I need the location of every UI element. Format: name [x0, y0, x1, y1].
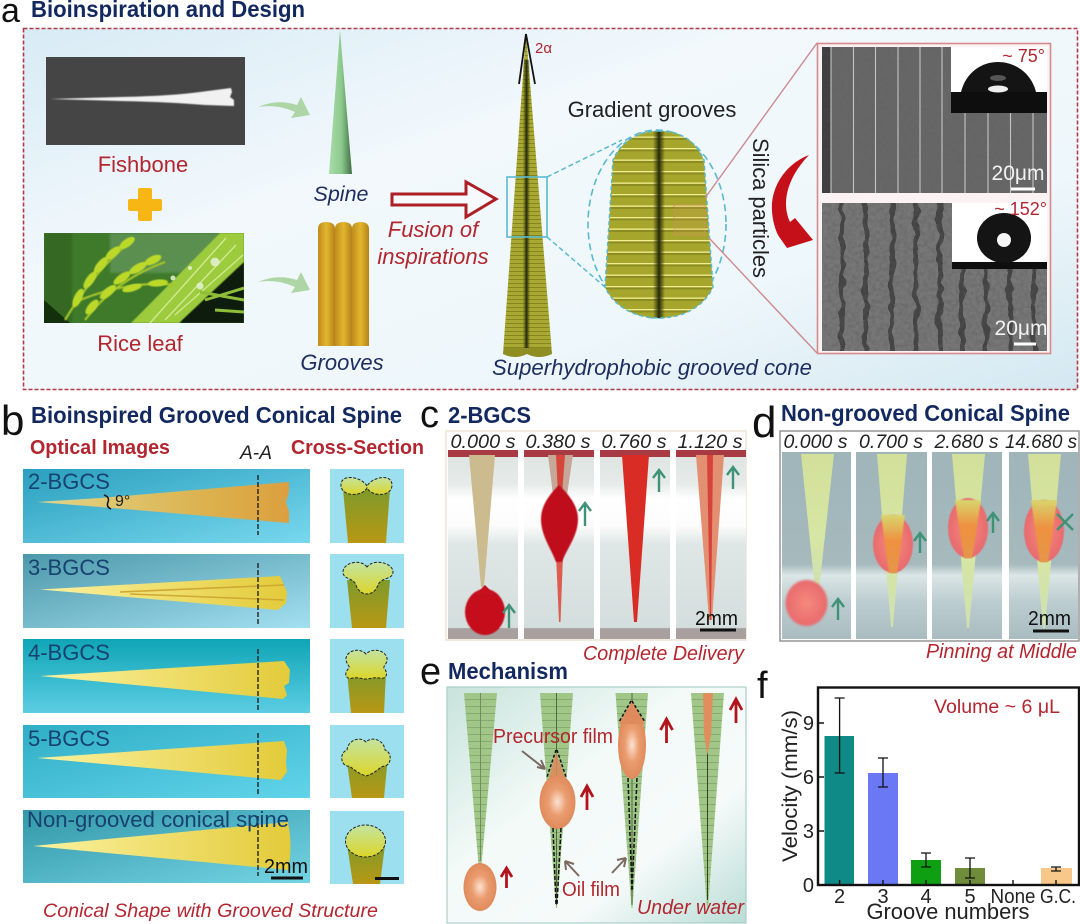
fusion label: inspirations	[377, 244, 489, 269]
bars	[824, 736, 1072, 885]
frame 0.700 s	[856, 431, 927, 639]
panel d: non-grooved time series	[780, 431, 1079, 663]
red curved arrow	[772, 155, 813, 248]
frame 0.380 s	[524, 431, 594, 639]
optical images heading: Optical Images	[30, 437, 170, 459]
oil film label: Oil film	[562, 879, 620, 901]
panel d title: Non-grooved Conical Spine	[781, 400, 1070, 426]
icon: grooves	[318, 222, 369, 346]
frame 14.680 s	[1005, 431, 1078, 639]
y tick labels: 6	[803, 767, 814, 789]
fusion label	[377, 217, 489, 269]
grooves label: Grooves	[300, 350, 384, 375]
y tick labels: 9	[803, 713, 814, 735]
row: 3-BGCS	[23, 554, 404, 628]
frame 2.680 s: 2.680 s	[933, 431, 999, 453]
frame 2.680 s	[932, 431, 1002, 639]
gradient grooves label: Gradient grooves	[568, 97, 736, 122]
y axis label: Velocity (mm/s)	[779, 710, 802, 862]
cone caption: Superhydrophobic grooved cone	[492, 355, 812, 380]
selected area	[674, 205, 705, 235]
panel c letter: c	[420, 394, 439, 436]
x tick labels: 3	[877, 886, 889, 908]
arrow: rice leaf to grooves	[258, 272, 310, 293]
frame	[446, 431, 746, 640]
panel b letter: b	[1, 397, 24, 444]
under water label: Under water	[637, 897, 745, 919]
stage 4	[691, 693, 742, 908]
superhydrophobic cone	[503, 33, 552, 357]
SEM image: untreated grooves	[822, 47, 1047, 193]
row: 2-BGCS: 9°	[115, 493, 130, 510]
frame 0.000 s	[782, 431, 851, 639]
gradient groove detail	[588, 130, 726, 318]
error bars	[835, 698, 1061, 878]
volume annotation: Volume ~ 6 μL	[934, 697, 1060, 718]
row: non-grooved conical spine: 2mm	[264, 856, 308, 878]
frame	[780, 431, 1079, 641]
SEM image: silica coated	[822, 203, 1047, 351]
contact angle inset 152 degrees	[952, 203, 1047, 269]
row: non-grooved conical spine	[23, 807, 404, 884]
stage 1	[464, 693, 512, 911]
x tick labels	[834, 886, 1076, 908]
oil film pointers	[565, 858, 626, 876]
panel c: 2-BGCS time series	[446, 431, 746, 665]
row: 4-BGCS	[23, 639, 404, 713]
precursor film pointer	[522, 751, 545, 769]
fusion arrow	[392, 182, 496, 217]
SEM frame	[818, 44, 1050, 354]
frame 1.120 s: 1.120 s	[678, 431, 743, 453]
frame 0.000 s	[448, 431, 518, 639]
angle marker 2 alpha	[519, 34, 535, 84]
fusion label: Fusion of	[388, 217, 481, 242]
stage 3	[616, 693, 672, 908]
zoom guides	[547, 140, 622, 287]
dashed frame	[24, 28, 1078, 390]
x tick labels: G.C.	[1040, 886, 1076, 908]
frame 0.000 s: 0.000 s	[784, 431, 848, 453]
panel b caption: Conical Shape with Grooved Structure	[43, 901, 378, 922]
frame 0.700 s: 0.700 s	[859, 431, 923, 453]
frame 0.760 s	[600, 431, 670, 639]
frame 14.680 s: 2mm	[1028, 608, 1071, 630]
scale label bottom: 20μm	[995, 317, 1047, 340]
fishbone photo	[46, 57, 245, 145]
highlight rectangle	[507, 177, 547, 237]
fishbone label: Fishbone	[98, 152, 188, 177]
panel b: optical images and cross sections	[23, 437, 424, 922]
y tick labels: 3	[803, 821, 814, 843]
rice leaf photo	[44, 233, 244, 323]
panel c title: 2-BGCS	[448, 402, 531, 428]
y tick labels	[803, 713, 814, 897]
plus icon	[128, 188, 162, 221]
angle label: 2α	[535, 40, 552, 57]
frame 0.380 s: 0.380 s	[526, 431, 591, 453]
x axis label: Groove numbers	[866, 899, 1030, 924]
panel d letter: d	[752, 398, 776, 447]
frame 0.760 s: 0.760 s	[602, 431, 667, 453]
x tick labels: 2	[834, 886, 845, 908]
panel b title: Bioinspired Grooved Conical Spine	[31, 402, 402, 428]
frame 1.120 s: 2mm	[695, 608, 738, 630]
frame 0.000 s: 0.000 s	[450, 431, 516, 453]
scale bar top	[1011, 188, 1035, 190]
stage 2	[540, 693, 593, 908]
x tick labels: 4	[920, 886, 932, 908]
cross-section heading: Cross-Section	[291, 437, 424, 459]
panel e letter: e	[420, 651, 441, 693]
row: non-grooved conical spine: Non-grooved conical spine	[27, 807, 289, 832]
y tick labels: 0	[803, 875, 814, 897]
panel f letter: f	[757, 665, 768, 707]
angle 75 label: ~ 75°	[1002, 46, 1045, 66]
row: 2-BGCS: 2-BGCS	[28, 469, 110, 494]
silica particles label: Silica particles	[748, 138, 773, 278]
panel f: velocity bar chart	[779, 688, 1079, 924]
section marker A-A: A-A	[239, 442, 272, 464]
row: 2-BGCS	[23, 469, 404, 543]
row: 4-BGCS: 4-BGCS	[28, 640, 110, 665]
panel a: bioinspiration and design	[24, 28, 1078, 390]
background	[447, 687, 746, 923]
precursor film label: Precursor film	[493, 726, 613, 748]
x tick labels: None	[990, 886, 1036, 908]
scale bar bottom	[1014, 342, 1036, 346]
scale label top: 20μm	[992, 162, 1044, 185]
panel e title: Mechanism	[448, 658, 568, 684]
rice leaf label: Rice leaf	[97, 331, 184, 356]
x tick labels: 5	[964, 886, 976, 908]
angle 152 label: ~ 152°	[994, 199, 1047, 219]
frame 14.680 s: 14.680 s	[1005, 431, 1077, 453]
arrow: fishbone to spine	[258, 97, 310, 118]
row: 5-BGCS: 5-BGCS	[28, 726, 110, 751]
frame 1.120 s	[676, 431, 746, 639]
tick marks	[818, 723, 1056, 885]
panel c caption: Complete Delivery	[583, 643, 745, 665]
magnification lines	[705, 43, 817, 353]
chart frame	[818, 688, 1079, 885]
row: 3-BGCS: 3-BGCS	[28, 555, 110, 580]
panel e: mechanism	[447, 687, 746, 923]
panel d caption: Pinning at Middle	[926, 641, 1077, 663]
row: 5-BGCS	[23, 725, 404, 798]
icon: spine	[329, 30, 352, 174]
contact angle inset 75 degrees	[951, 47, 1047, 113]
spine label: Spine	[314, 182, 369, 206]
